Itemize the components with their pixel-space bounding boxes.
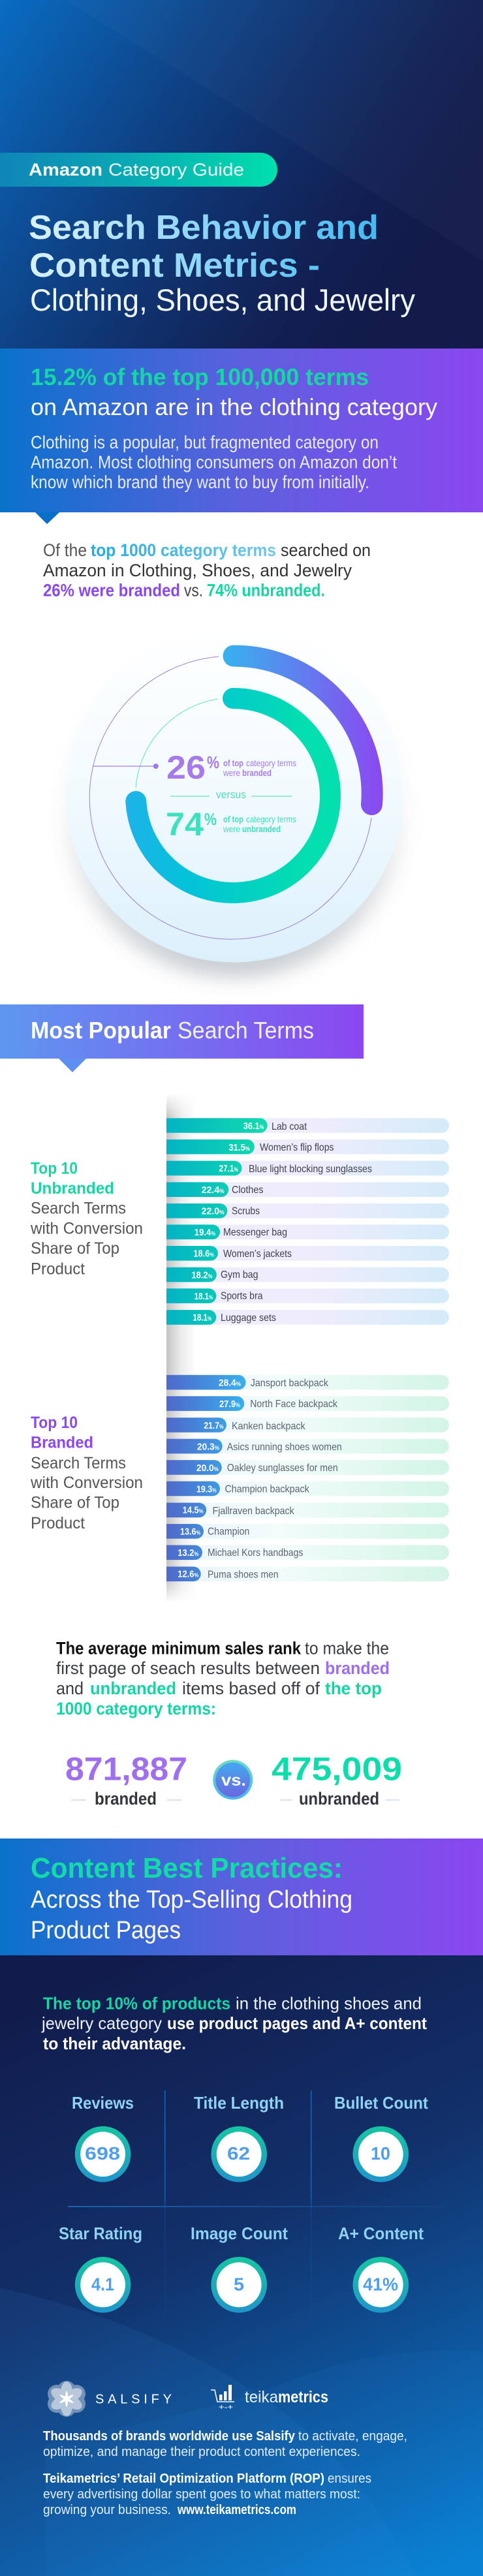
heading: 15.2 percent stat: 15.2% of the top 100,000 terms	[31, 364, 369, 390]
thin inner arc	[136, 699, 218, 788]
bar chart: top 10 unbranded: 18.1%	[195, 1291, 213, 1302]
text block: top 10 branded heading: with Conversion	[30, 1474, 143, 1492]
metric: image count: Image Count	[191, 2224, 288, 2243]
heading: most popular search terms: Search Terms	[178, 1017, 314, 1044]
pill: category guide label: Category Guide	[108, 160, 244, 179]
text block: about Teikametrics: www.teikametrics.com	[177, 2502, 296, 2517]
bar chart: top 10 branded: 28.4%	[219, 1377, 241, 1389]
title: Clothing, Shoes, and Jewelry	[30, 283, 415, 317]
metric: bullet count	[334, 2093, 428, 2182]
text block: top 10 percent of products: use product pages and A+ content	[167, 2013, 427, 2033]
text block: top 10 unbranded heading: Product	[31, 1260, 85, 1278]
metric: title length: Title Length	[194, 2093, 284, 2113]
text block: about Salsify	[43, 2429, 407, 2459]
heading: most popular search terms: Most Popular	[31, 1017, 171, 1044]
bar chart: top 10 unbranded: Messenger bag	[223, 1227, 287, 1238]
text block: top 1000 terms intro: searched on	[281, 540, 371, 560]
bar chart: top 10 branded: 13.6%	[180, 1526, 200, 1538]
metric: A+ content: A+ Content	[338, 2224, 424, 2243]
badge: vs	[213, 1760, 253, 1800]
text block: top 10 unbranded heading: Unbranded	[31, 1179, 114, 1198]
badge: vs: vs.	[221, 1771, 246, 1790]
text block: about Teikametrics: every advertising dollar spent goes to what matters most:	[43, 2487, 360, 2502]
title: Content Metrics -	[29, 247, 320, 285]
metric: title length	[194, 2093, 284, 2182]
text block: top 10 percent of products: in the clothing shoes and	[236, 1994, 422, 2013]
bar chart: top 10 unbranded: 18.1%	[193, 1312, 211, 1324]
text block: about Teikametrics	[43, 2471, 371, 2517]
bar chart: top 10 unbranded: 27.1%	[219, 1163, 238, 1174]
bar chart: top 10 branded: Oakley sunglasses for men	[227, 1463, 338, 1474]
chart: branded vs unbranded donut	[63, 625, 405, 978]
logo: Teikametrics: teika	[245, 2388, 278, 2406]
text block: top 10 unbranded heading: Share of Top	[31, 1239, 119, 1258]
text block: about Teikametrics: Teikametrics’ Retail Optimization Platform (ROP)	[43, 2471, 324, 2486]
logo: Teikametrics: metrics	[278, 2388, 328, 2406]
text block: top 1000 terms intro: vs.	[184, 581, 203, 600]
text block: top 10 percent of products: to their advantage.	[43, 2034, 186, 2053]
arc: 74 percent unbranded	[136, 698, 330, 893]
text block: category description	[31, 432, 397, 492]
metric: title length: 62	[227, 2143, 250, 2164]
panel: content best practices heading: Product Pages	[31, 1917, 181, 1944]
text block: top 1000 terms intro: 26% were branded	[43, 581, 180, 600]
bar chart: top 10 branded: 20.3%	[197, 1441, 219, 1453]
panel: dark metrics section	[0, 1955, 483, 2576]
text block: top 1000 terms intro: 74% unbranded.	[207, 581, 325, 600]
bar chart: top 10 branded: Champion backpack	[225, 1484, 310, 1495]
bar chart: top 10 branded: Jansport backpack	[251, 1378, 329, 1389]
metric: reviews: Reviews	[72, 2093, 134, 2113]
bar chart: top 10 branded: 20.0%	[196, 1463, 219, 1474]
text block: category description: Amazon. Most clothing consumers on Amazon don’t	[31, 452, 397, 473]
text block: top 10 percent of products	[41, 1994, 427, 2053]
metric: A+ content	[338, 2224, 424, 2313]
label: versus divider: versus	[216, 788, 246, 801]
label: 26 percent branded	[166, 749, 296, 786]
logo: Teikametrics	[211, 2385, 328, 2412]
text block: average minimum sales rank: items based off of	[182, 1679, 320, 1698]
stat: 871,887 branded	[65, 1750, 187, 1808]
metric: star rating: Star Rating	[59, 2224, 142, 2243]
text block: top 10 branded heading: Product	[31, 1514, 85, 1532]
text block: average minimum sales rank: and	[56, 1679, 84, 1698]
bar chart: top 10 branded: 19.3%	[196, 1484, 217, 1495]
text block: about Salsify: Thousands of brands worldwide use Salsify	[43, 2429, 296, 2444]
text block: average minimum sales rank: to make the	[305, 1639, 389, 1658]
bar chart: top 10 branded: Asics running shoes women	[227, 1442, 342, 1453]
bar chart: top 10 unbranded: Lab coat	[272, 1121, 307, 1132]
bar chart: top 10 branded: Champion	[208, 1526, 249, 1538]
arrow: band pointer	[35, 512, 59, 524]
metric: image count	[191, 2224, 288, 2313]
bar chart: top 10 unbranded: Luggage sets	[221, 1312, 276, 1324]
bar column shadow	[166, 1093, 196, 1603]
bar chart: top 10 branded: 13.2%	[178, 1547, 198, 1559]
text block: top 10 unbranded heading: with Conversion	[30, 1220, 143, 1238]
logo: Teikametrics: +-+	[219, 2402, 233, 2412]
label: 74 percent unbranded: category terms	[246, 814, 296, 824]
bar chart: top 10 branded: 14.5%	[183, 1505, 204, 1515]
bar chart: top 10 branded: North Face backpack	[250, 1399, 338, 1410]
text block: top 10 branded heading: Top 10	[31, 1414, 78, 1432]
label: 74 percent unbranded: of top	[223, 814, 243, 824]
bar chart: top 10 unbranded: 31.5%	[228, 1142, 250, 1153]
leader line to 26 percent	[93, 764, 159, 769]
metric: reviews: 698	[85, 2143, 120, 2164]
thin outer arc	[89, 657, 371, 939]
text block: top 1000 terms intro: Amazon in Clothing, Shoes, and Jewelry	[43, 561, 352, 580]
bar chart: top 10 unbranded: Scrubs	[232, 1206, 260, 1217]
stat: 475,009 unbranded	[272, 1750, 402, 1808]
text block: about Salsify: to activate, engage,	[298, 2429, 407, 2444]
text block: top 10 branded heading: Branded	[31, 1434, 93, 1452]
logo: Salsify: SALSIFY	[95, 2393, 172, 2407]
panel: content best practices heading: Content Best Practices:	[31, 1852, 343, 1884]
label: 26 percent branded: of top	[223, 758, 243, 768]
label: 26 percent branded: %	[207, 753, 219, 772]
text block: about Teikametrics: ensures	[328, 2471, 371, 2486]
bar chart: top 10 unbranded: Women’s jackets	[223, 1249, 292, 1260]
bar chart: top 10 branded: 27.9%	[219, 1399, 240, 1410]
bar chart: top 10 branded: Puma shoes men	[208, 1569, 279, 1581]
label: 26 percent branded: category terms	[246, 758, 296, 768]
bar chart: top 10 unbranded	[153, 1118, 449, 1325]
bar chart: top 10 branded: 12.6%	[178, 1569, 198, 1579]
label: 26 percent branded: were	[223, 768, 240, 778]
bar chart: top 10 unbranded: Sports bra	[221, 1291, 263, 1301]
stat: 871,887 branded: branded	[95, 1789, 157, 1808]
text block: about Teikametrics: growing your business.	[43, 2502, 171, 2517]
metric: reviews	[72, 2093, 134, 2182]
heading: 15.2 percent stat: on Amazon are in the clothing category	[31, 394, 437, 420]
text block: top 1000 terms intro	[43, 540, 371, 600]
bar chart: top 10 unbranded: 36.1%	[243, 1121, 264, 1132]
label: 74 percent unbranded	[166, 806, 296, 843]
bar chart: top 10 unbranded: 19.4%	[195, 1227, 215, 1238]
text block: top 10 percent of products: The top 10% of products	[43, 1994, 230, 2013]
heading: most popular search terms	[0, 1004, 364, 1072]
text block: average minimum sales rank: branded	[325, 1658, 390, 1678]
bar chart: top 10 branded: Kanken backpack	[232, 1421, 306, 1432]
metric: image count: 5	[234, 2274, 244, 2295]
bar chart: top 10 branded: 21.7%	[204, 1420, 223, 1431]
text block: category description: Clothing is a popular, but fragmented category on	[31, 432, 379, 452]
bar chart: top 10 unbranded: 22.4%	[202, 1185, 225, 1196]
heading: 15.2 percent stat	[31, 364, 437, 420]
panel: clothing category stat band	[0, 349, 483, 524]
text block: top 1000 terms intro: top 1000 category terms	[91, 540, 276, 560]
text block: average minimum sales rank: 1000 category terms:	[56, 1699, 216, 1718]
bar chart: top 10 unbranded: 18.6%	[193, 1248, 214, 1260]
text block: top 10 unbranded heading: Top 10	[31, 1160, 78, 1178]
text block: category description: know which brand they want to buy from initially.	[31, 472, 369, 492]
text block: average minimum sales rank: unbranded	[90, 1679, 176, 1698]
text block: top 10 branded heading: Search Terms	[31, 1454, 126, 1472]
text block: top 10 percent of products: jewelry category	[41, 2013, 162, 2033]
stat: 871,887 branded: 871,887	[65, 1750, 187, 1787]
bar chart: top 10 branded	[153, 1375, 449, 1581]
bar chart: top 10 branded: Michael Kors handbags	[208, 1547, 303, 1559]
stat: 475,009 unbranded: 475,009	[272, 1750, 402, 1787]
logo: Salsify	[48, 2381, 172, 2417]
pill: category guide label	[0, 153, 277, 187]
text block: top 10 unbranded heading: Search Terms	[31, 1200, 126, 1218]
label: 74 percent unbranded: %	[204, 809, 217, 829]
bar chart: top 10 unbranded: Clothes	[232, 1185, 264, 1196]
label: 74 percent unbranded: were	[223, 824, 240, 834]
text block: top 1000 terms intro: Of the	[43, 540, 87, 560]
text block: top 10 unbranded heading	[30, 1160, 143, 1278]
metric: bullet count: 10	[371, 2143, 390, 2164]
metric: star rating	[59, 2224, 142, 2313]
text block: top 10 branded heading	[30, 1414, 143, 1532]
bar chart: top 10 branded: Fjallraven backpack	[213, 1506, 295, 1517]
bar chart: top 10 unbranded: Blue light blocking sunglasses	[249, 1164, 372, 1175]
bar chart: top 10 unbranded: 22.0%	[202, 1206, 225, 1217]
text block: average minimum sales rank: first page of seach results between	[56, 1658, 320, 1678]
label: 74 percent unbranded: unbranded	[242, 824, 281, 834]
panel: header	[0, 0, 483, 349]
metric: A+ content: 41%	[363, 2274, 398, 2295]
text block: top 10 branded heading: Share of Top	[31, 1494, 119, 1512]
label: 74 percent unbranded: 74	[166, 806, 204, 843]
text block: average minimum sales rank	[56, 1639, 390, 1718]
metric: star rating: 4.1	[91, 2274, 114, 2295]
title: Search Behavior and	[29, 209, 379, 247]
metric: bullet count: Bullet Count	[334, 2093, 428, 2113]
text block: about Salsify: optimize, and manage their product content experiences.	[43, 2444, 360, 2459]
arc: 26 percent branded	[234, 656, 372, 804]
text block: average minimum sales rank: the top	[325, 1679, 382, 1698]
pill: category guide label: Amazon	[29, 160, 102, 179]
bar chart: top 10 unbranded: Women’s flip flops	[260, 1142, 334, 1153]
bar chart: top 10 unbranded: Gym bag	[221, 1269, 258, 1280]
panel: content best practices heading	[0, 1839, 483, 1955]
text block: average minimum sales rank: The average minimum sales rank	[56, 1639, 302, 1658]
bar chart: top 10 unbranded: 18.2%	[192, 1270, 213, 1280]
label: 26 percent branded: 26	[166, 749, 206, 786]
stat: 475,009 unbranded: unbranded	[299, 1789, 379, 1808]
label: 26 percent branded: branded	[242, 768, 272, 778]
title	[29, 209, 415, 317]
panel: content best practices heading: Across the Top-Selling Clothing	[31, 1886, 352, 1914]
